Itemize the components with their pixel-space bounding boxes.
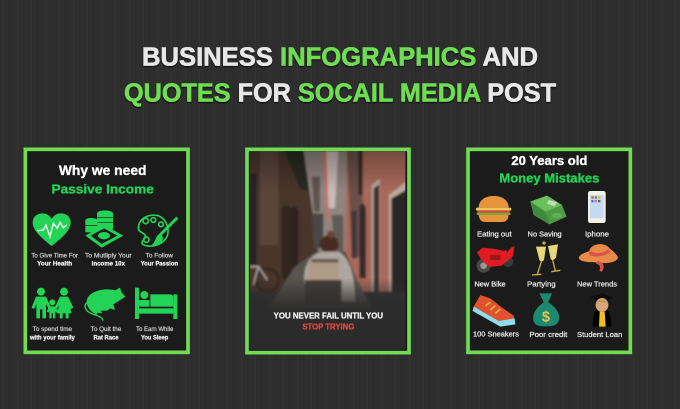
icon: heart (33, 213, 71, 246)
icon: champagne glasses (532, 241, 560, 275)
icon: money and coins (85, 210, 123, 248)
caption: 100 sneakers: 100 Sneakers (473, 332, 520, 339)
caption: your health: Your Health (37, 262, 73, 268)
caption: student loan: Student Loan (577, 332, 622, 339)
heading: money mistakes: Money Mistakes (499, 171, 599, 185)
icon: rat (85, 288, 125, 321)
icon: sneaker (473, 295, 515, 327)
heading: why we need: Why we need (59, 162, 146, 178)
icon: burger (476, 196, 511, 222)
panel: money mistakes (468, 149, 630, 352)
caption: rat race: Rat Race (93, 335, 119, 341)
caption: new bike: New Bike (474, 281, 506, 288)
icon: iphone (588, 191, 606, 223)
caption: with your family: with your family (29, 335, 75, 341)
panel: passive income (25, 149, 188, 352)
icon: money bag (533, 293, 559, 326)
caption: iphone: Iphone (585, 231, 609, 238)
caption: income 10x: Income 10x (92, 262, 126, 268)
icon: bed (135, 288, 177, 319)
icon: palette and brush (138, 215, 177, 246)
caption: quit the: To Quit the (91, 327, 122, 333)
panel: quote photo (247, 148, 410, 353)
caption: earn while: To Earn While (136, 327, 174, 333)
photo: alley with backpacker (247, 148, 410, 352)
title (124, 44, 556, 108)
caption: no saving: No Saving (528, 231, 562, 238)
title: BUSINESS INFOGRAPHICS AND (142, 44, 538, 72)
caption: partying: Partying (527, 281, 556, 288)
caption: eating out: Eating out (477, 231, 512, 238)
icon: money stack (530, 196, 567, 224)
caption: health: To Give Time For (31, 253, 78, 259)
caption: new trends: New Trends (577, 281, 618, 288)
quote: stop trying: STOP TRYING (302, 322, 354, 331)
caption: you sleep: You Sleep (141, 335, 169, 341)
icon: hat (579, 244, 618, 272)
caption: multiply: To Mutliply Your (85, 253, 132, 259)
caption: poor credit: Poor credit (529, 332, 567, 339)
caption: spend time: To spend time (33, 327, 73, 333)
quote: you never fail: YOU NEVER FAIL UNTIL YOU (274, 311, 383, 320)
heading: passive income: Passive Income (51, 182, 154, 197)
heading: 20 years old: 20 Years old (511, 154, 587, 168)
caption: follow: To Follow (146, 253, 174, 259)
icon: family (32, 288, 73, 318)
title: QUOTES FOR SOCAIL MEDIA POST (124, 80, 556, 108)
icon: money bag: $ (542, 310, 550, 326)
icon: motorbike (477, 245, 515, 273)
caption: your passion: Your Passion (141, 262, 178, 268)
icon: graduate student (590, 293, 614, 327)
